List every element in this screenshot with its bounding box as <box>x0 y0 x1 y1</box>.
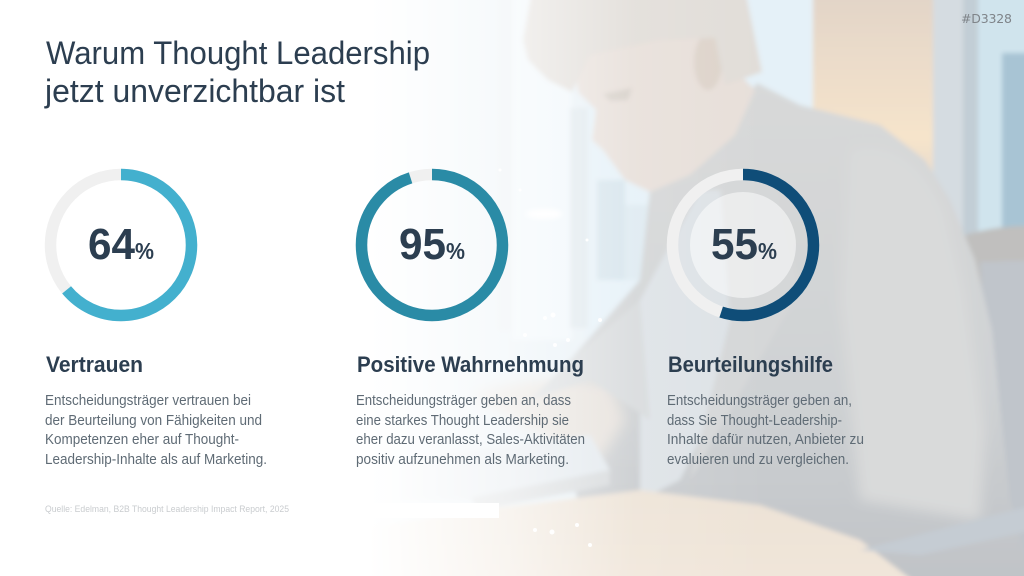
heading: Vertrauen <box>46 352 143 377</box>
body text: Inhalte dafür nutzen, Anbieter zu <box>667 432 864 448</box>
jacket <box>530 83 1024 576</box>
body text <box>356 393 585 468</box>
body text: Kompetenzen eher auf Thought- <box>45 432 239 448</box>
window frame left <box>498 0 512 330</box>
panel: Beurteilungshilfe <box>667 174 864 468</box>
hand <box>470 379 625 460</box>
heading: Beurteilungshilfe <box>668 352 833 377</box>
donut chart 55% <box>672 174 814 316</box>
body text: evaluieren und zu vergleichen. <box>667 452 849 468</box>
body text: der Beurteilung von Fähigkeiten und <box>45 413 262 429</box>
body text <box>45 393 267 468</box>
shirt strip <box>640 190 770 500</box>
skyline <box>597 180 625 280</box>
lamp <box>526 209 562 219</box>
source note: Quelle: Edelman, B2B Thought Leadership Impact Report, 2025 <box>45 504 289 515</box>
donut chart 95% <box>362 174 502 316</box>
donut chart 64% <box>50 174 192 316</box>
hair <box>523 0 762 92</box>
warm wall panel <box>813 0 933 200</box>
body text: positiv aufzunehmen als Marketing. <box>356 452 569 468</box>
donut chart 55%: 55 <box>711 220 758 269</box>
donut chart 64%: 64 <box>88 220 135 269</box>
window right <box>978 0 1024 240</box>
body text: Leadership-Inhalte als auf Marketing. <box>45 452 267 468</box>
panel: Vertrauen <box>45 174 267 468</box>
title: Warum Thought Leadership <box>46 35 430 71</box>
body text: dass Sie Thought-Leadership- <box>667 413 842 429</box>
donut chart 95%: % <box>446 238 465 264</box>
eye and brow <box>603 88 632 101</box>
table <box>350 490 925 576</box>
heading: Positive Wahrnehmung <box>357 352 584 377</box>
donut chart 64%: % <box>135 238 154 264</box>
body text <box>667 393 864 468</box>
chair <box>960 226 1024 576</box>
title <box>44 35 430 109</box>
donut chart 55%: % <box>758 238 777 264</box>
reference code: #D3328 <box>961 11 1012 26</box>
body text: eine starkes Thought Leadership sie <box>356 413 569 429</box>
blue chair accent <box>860 505 1024 555</box>
sleeve shading on left <box>530 300 650 420</box>
title: jetzt unverzichtbar ist <box>44 73 345 109</box>
laptop <box>400 435 610 500</box>
body text: Entscheidungsträger geben an, dass <box>356 393 571 409</box>
white source strip <box>360 503 499 518</box>
window frame right <box>933 0 963 250</box>
body text: eher dazu veranlasst, Sales-Aktivitäten <box>356 432 585 448</box>
body text: Entscheidungsträger vertrauen bei <box>45 393 251 409</box>
donut chart 95%: 95 <box>399 220 446 269</box>
ear <box>694 34 722 90</box>
panel: Positive Wahrnehmung <box>356 174 585 468</box>
particles <box>498 168 602 547</box>
window left <box>512 0 572 340</box>
body text: Entscheidungsträger geben an, <box>667 393 852 409</box>
neck and face <box>575 30 755 192</box>
